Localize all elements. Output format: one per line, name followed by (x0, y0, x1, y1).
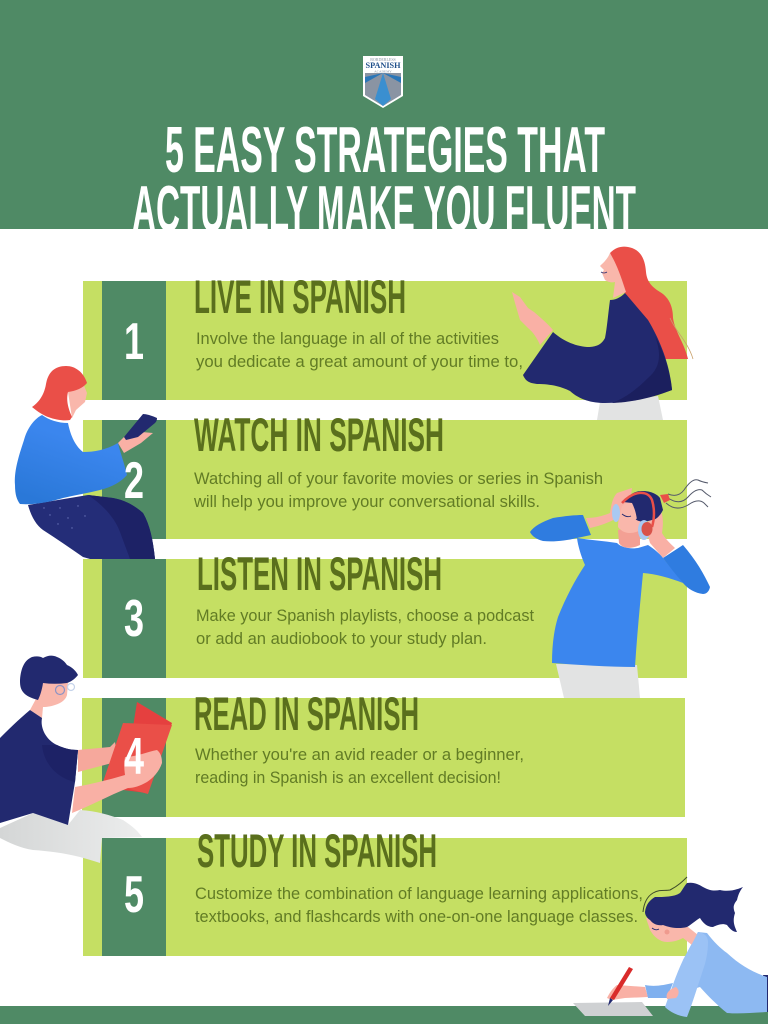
illustration: woman writing (573, 877, 768, 1017)
panel: step 5 study in Spanish: textbooks, and flashcards with one-on-one language classes. (195, 907, 638, 926)
panel: step 4 read in Spanish: Whether you're an avid reader or a beginner, (195, 745, 524, 764)
header band (0, 0, 768, 229)
logo: SPANISH (366, 61, 401, 70)
logo: ACADEMY (374, 70, 392, 74)
step 4 number: 4 (124, 728, 144, 786)
panel: step 1 live in Spanish (83, 270, 687, 400)
illustration: woman pointing (512, 247, 693, 420)
panel: step 1 live in Spanish: Involve the language in all of the activities (196, 329, 499, 348)
panel: step 4 read in Spanish: READ IN SPANISH (194, 687, 419, 740)
panel: step 3 listen in Spanish: Make your Spanish playlists, choose a podcast (196, 606, 534, 625)
panel: step 2 watch in Spanish (83, 408, 687, 539)
panel: step 2 watch in Spanish: WATCH IN SPANISH (194, 408, 444, 461)
panel: step 4 read in Spanish: reading in Spanish is an excellent decision! (195, 768, 501, 787)
panel: step 3 listen in Spanish (83, 547, 687, 678)
panel: step 3 listen in Spanish: or add an audiobook to your study plan. (196, 629, 487, 648)
panel: step 5 study in Spanish: 5 (124, 866, 144, 924)
panel: step 5 study in Spanish (83, 824, 687, 956)
panel: step 3 listen in Spanish: 3 (124, 590, 144, 648)
panel: step 5 study in Spanish: STUDY IN SPANISH (197, 824, 437, 877)
step 2 number: 2 (124, 452, 144, 510)
bottom band (0, 1006, 768, 1024)
panel: step 3 listen in Spanish: LISTEN IN SPANISH (197, 547, 442, 600)
panel: step 1 live in Spanish: you dedicate a great amount of your time to, (196, 352, 523, 371)
logo (363, 56, 403, 108)
panel: step 1 live in Spanish: 1 (124, 313, 144, 371)
panel: step 4 read in Spanish (82, 687, 685, 817)
illustration: woman with headphones (530, 480, 711, 698)
panel: step 5 study in Spanish: Customize the combination of language learning applications, (195, 884, 643, 903)
illustration: woman with phone (15, 366, 157, 559)
panel: step 2 watch in Spanish: Watching all of your favorite movies or series in Spanish (194, 469, 603, 488)
illustration: man reading (0, 656, 172, 863)
title (133, 126, 636, 229)
logo: BORDERLESS (370, 57, 396, 62)
panel: step 1 live in Spanish: LIVE IN SPANISH (194, 270, 406, 323)
panel: step 2 watch in Spanish: will help you improve your conversational skills. (193, 492, 540, 511)
